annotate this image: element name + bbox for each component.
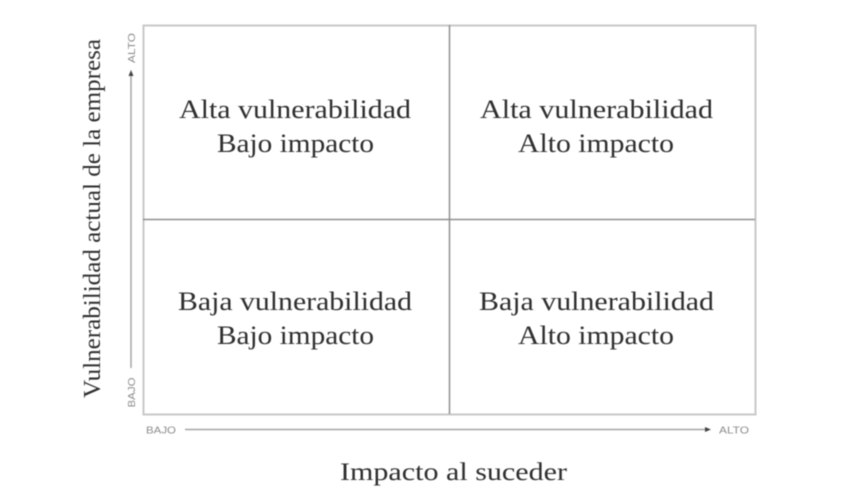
quadrant: low vulnerability, low impact	[178, 287, 412, 350]
quadrant: high vulnerability, low impact: Alta vulnerabilidad	[179, 95, 411, 124]
quadrant: high vulnerability, high impact: Alta vulnerabilidad	[480, 95, 713, 124]
quadrant: high vulnerability, low impact: Bajo impacto	[217, 129, 374, 158]
y axis low label: BAJO	[126, 378, 138, 407]
matrix grid	[143, 25, 756, 414]
quadrant: low vulnerability, high impact	[479, 287, 714, 350]
x axis high label: ALTO	[719, 424, 749, 436]
quadrant: low vulnerability, high impact: Baja vulnerabilidad	[479, 287, 714, 316]
y axis high label: ALTO	[126, 33, 138, 63]
quadrant: high vulnerability, high impact: Alto impacto	[518, 129, 674, 158]
quadrant: low vulnerability, high impact: Alto impacto	[518, 321, 674, 350]
y axis title: Vulnerabilidad actual de la empresa	[80, 39, 106, 398]
quadrant: high vulnerability, low impact	[179, 95, 411, 158]
quadrant: low vulnerability, low impact: Bajo impacto	[217, 321, 374, 350]
x axis title: Impacto al suceder	[340, 457, 568, 486]
quadrant: low vulnerability, low impact: Baja vulnerabilidad	[178, 287, 412, 316]
y axis arrow	[128, 70, 134, 368]
x axis low label: BAJO	[146, 424, 176, 436]
x axis arrow	[185, 427, 711, 432]
quadrant: high vulnerability, high impact	[480, 95, 713, 158]
